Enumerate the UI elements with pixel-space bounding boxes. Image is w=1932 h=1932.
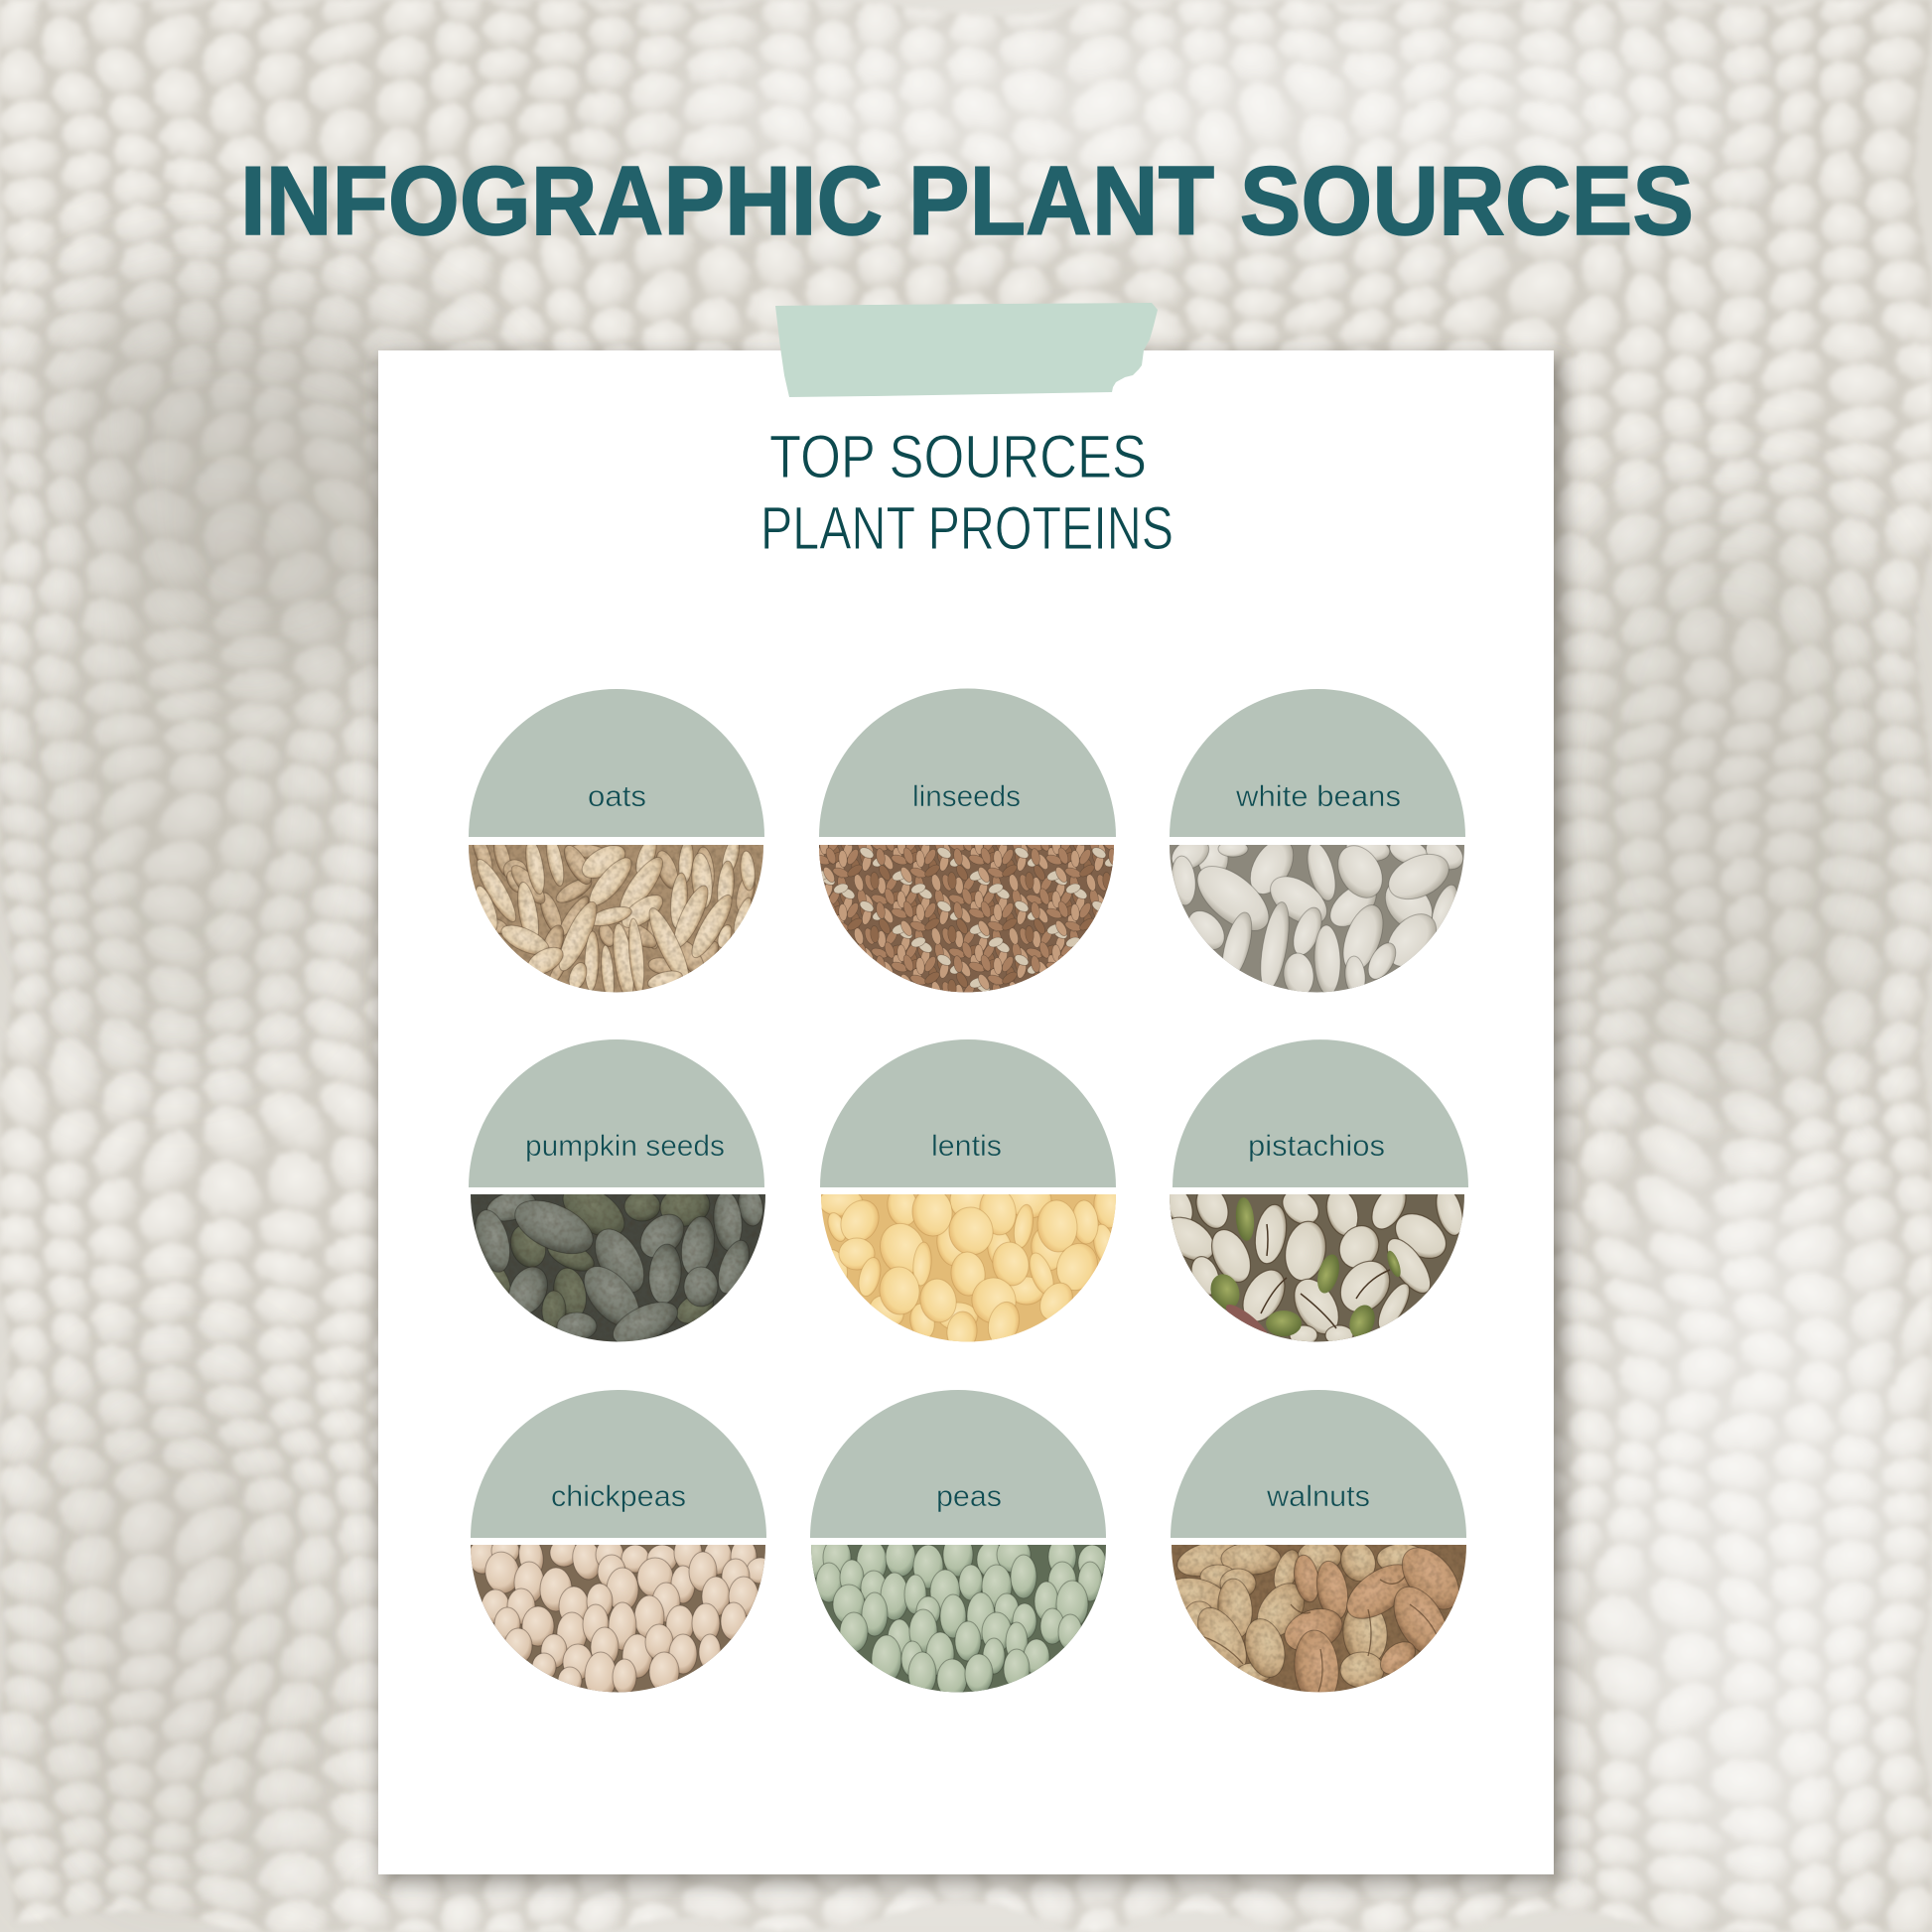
walnuts photo bbox=[1161, 1535, 1470, 1708]
walnuts label: walnuts bbox=[1266, 1480, 1370, 1513]
peas label bbox=[810, 1390, 1106, 1538]
card: pumpkin seeds bbox=[469, 1039, 765, 1353]
lentis photo bbox=[814, 1180, 1124, 1352]
chickpeas label bbox=[471, 1390, 766, 1538]
walnuts label bbox=[1171, 1390, 1466, 1538]
peas photo bbox=[804, 1533, 1106, 1699]
linseeds label: linseeds bbox=[912, 780, 1021, 813]
tape bbox=[775, 303, 1158, 397]
oats label: oats bbox=[588, 780, 646, 813]
peas label: peas bbox=[936, 1480, 1002, 1513]
card: walnuts bbox=[1161, 1390, 1470, 1708]
card: lentis bbox=[814, 1039, 1124, 1352]
subtitle: PLANT PROTEINS bbox=[760, 494, 1173, 562]
white beans label bbox=[1170, 689, 1465, 837]
oats photo bbox=[469, 845, 763, 993]
card: linseeds bbox=[819, 689, 1116, 993]
card: pistachios bbox=[1157, 1039, 1468, 1347]
paper shadow bbox=[381, 357, 1563, 1882]
card: chickpeas bbox=[469, 1390, 774, 1700]
chickpeas photo bbox=[469, 1535, 774, 1700]
panel: paper sheet bbox=[378, 303, 1554, 1874]
card: oats bbox=[469, 689, 764, 1001]
main title: INFOGRAPHIC PLANT SOURCES bbox=[240, 146, 1694, 255]
pistachios label bbox=[1173, 1039, 1468, 1187]
card: white beans bbox=[1167, 689, 1468, 998]
card: peas bbox=[804, 1390, 1106, 1699]
subtitle bbox=[760, 423, 1173, 562]
pumpkin seeds label: pumpkin seeds bbox=[525, 1130, 725, 1163]
linseeds photo bbox=[819, 845, 1114, 993]
pumpkin seeds label bbox=[469, 1039, 764, 1187]
pistachios photo bbox=[1157, 1179, 1467, 1347]
pistachios label: pistachios bbox=[1248, 1130, 1385, 1163]
white beans photo bbox=[1170, 845, 1464, 993]
lentis label bbox=[820, 1039, 1116, 1187]
white beans label: white beans bbox=[1235, 780, 1401, 813]
oats label bbox=[469, 689, 764, 837]
lentis label: lentis bbox=[931, 1130, 1002, 1163]
subtitle: TOP SOURCES bbox=[769, 423, 1147, 490]
linseeds label bbox=[819, 689, 1116, 837]
pumpkin seeds photo bbox=[471, 1194, 765, 1342]
chickpeas label: chickpeas bbox=[551, 1480, 686, 1513]
